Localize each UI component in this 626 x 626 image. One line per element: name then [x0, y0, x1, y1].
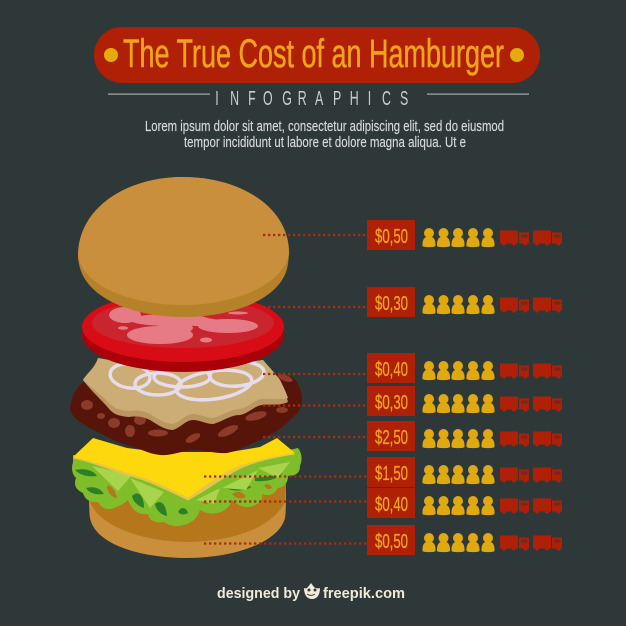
dark leaf folds: [75, 469, 283, 516]
cost row 3: onion: $0,40: [375, 359, 408, 381]
bottom bun: [89, 476, 286, 558]
melted cheese: [83, 358, 288, 430]
footer credit: [217, 583, 405, 602]
intro text: [145, 118, 504, 151]
cost row 4: melted cheese: [367, 386, 562, 416]
footer credit: designed by: [217, 585, 301, 602]
leader lines: [204, 235, 367, 544]
top bun: [78, 177, 289, 317]
cost row 1: top bun: [367, 220, 562, 250]
footer credit: freepik.com: [323, 585, 405, 602]
cost row 4: melted cheese: $0,30: [375, 392, 408, 414]
cost row 7: lettuce: [367, 488, 562, 518]
light leaf highlights: [92, 462, 290, 508]
cost row 8: bottom bun: $0,50: [375, 531, 408, 553]
yellow cheese slice: [73, 438, 295, 500]
patty: [70, 370, 302, 455]
intro text: tempor incididunt ut labore et dolore magna aliqua. Ut e: [184, 134, 466, 151]
cost row 3: onion: [367, 353, 562, 383]
cost row 2: tomato: $0,30: [375, 293, 408, 315]
icon: freepik mascot: [304, 583, 320, 599]
cost row 7: lettuce: $0,40: [375, 494, 408, 516]
cost row 6: cheese: [367, 457, 562, 487]
brown gaps between leaves: [107, 484, 272, 504]
cost row 6: cheese: $1,50: [375, 463, 408, 485]
title banner: [94, 27, 540, 83]
cost row 8: bottom bun: [367, 525, 562, 555]
onion rings: [109, 360, 265, 404]
lettuce: [72, 448, 302, 526]
green leaf mass: [72, 448, 302, 526]
cost row 5: patty: [367, 421, 562, 451]
cost row 5: patty: $2,50: [375, 427, 408, 449]
tomato slice: [82, 292, 284, 372]
cost row 1: top bun: $0,50: [375, 226, 408, 248]
illustration: hamburger: [70, 177, 302, 558]
intro text: Lorem ipsum dolor sit amet, consectetur adipiscing elit, sed do eiusmod: [145, 118, 504, 135]
cost row 2: tomato: [367, 287, 562, 317]
subtitle: infographics: INFOGRAPHICS: [215, 87, 408, 110]
